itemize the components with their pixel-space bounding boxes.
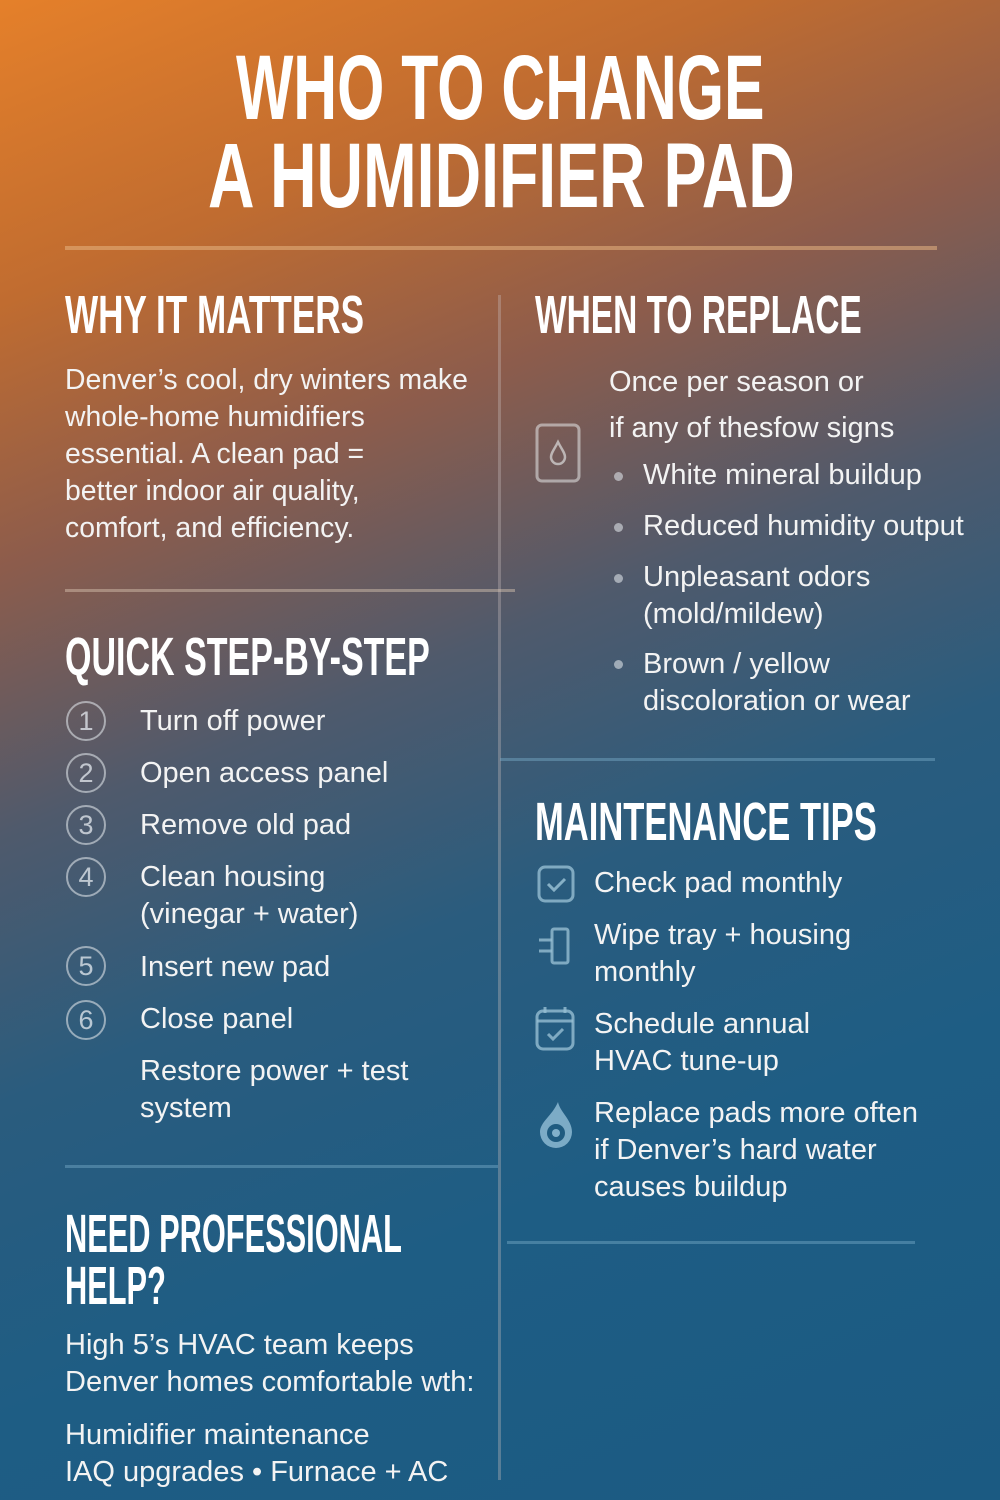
list: steps: Remove old pad [140, 809, 351, 841]
tip: wipe tray [594, 919, 851, 988]
heading: when to replace: WHEN TO REPLACE [535, 285, 862, 345]
list: signs: Reduced humidity output [643, 510, 964, 542]
panel: when to replace [535, 285, 964, 717]
list: steps: Open access panel [140, 757, 388, 789]
text: services [65, 1419, 448, 1488]
list: steps: 4 [78, 862, 94, 892]
list: signs [614, 459, 964, 717]
text: intro [609, 366, 894, 444]
list: steps: Clean housing [140, 861, 325, 893]
text: why it matters body: comfort, and efficiency. [65, 512, 354, 544]
list: steps: 5 [78, 951, 94, 981]
tip: hard water: causes buildup [594, 1171, 787, 1203]
list: signs: (mold/mildew) [643, 598, 823, 630]
text: help body: Denver homes comfortable wth: [65, 1366, 474, 1398]
panel: maintenance tips [535, 792, 918, 1203]
text: why it matters body: whole-home humidifiers [65, 401, 365, 433]
text: help body [65, 1329, 474, 1398]
tip: annual tune-up: Schedule annual [594, 1008, 810, 1040]
panel: need professional help [65, 1204, 474, 1488]
icon: tray [539, 928, 570, 964]
icon: water drop card [536, 424, 580, 482]
icon: calendar [536, 1007, 574, 1050]
tip: wipe tray: Wipe tray + housing [594, 919, 851, 951]
list: steps: 3 [78, 810, 94, 840]
text: services: Humidifier maintenance [65, 1419, 370, 1451]
heading: need professional help [65, 1204, 402, 1316]
list: steps: 2 [78, 758, 94, 788]
list: steps: Close panel [140, 1003, 293, 1035]
text: why it matters body: Denver’s cool, dry winters make [65, 364, 468, 396]
list: steps: system [140, 1092, 232, 1124]
list: steps: 1 [78, 706, 94, 736]
title [208, 37, 795, 227]
icon: flame drop [540, 1102, 572, 1148]
list: steps: Turn off power [140, 705, 325, 737]
list: steps: 6 [78, 1005, 94, 1035]
text: intro: if any of thesfow signs [609, 412, 894, 444]
panel: quick step-by-step [65, 627, 430, 1124]
text: why it matters body: essential. A clean pad = [65, 438, 364, 470]
tip: wipe tray: monthly [594, 956, 696, 988]
tip: check monthly: Check pad monthly [594, 867, 842, 899]
heading: need professional help: HELP? [65, 1256, 166, 1316]
text: intro: Once per season or [609, 366, 864, 398]
heading: quick step-by-step: QUICK STEP-BY-STEP [65, 627, 430, 687]
heading: need professional help: NEED PROFESSIONAL [65, 1204, 402, 1264]
list: signs: White mineral buildup [643, 459, 922, 491]
tip: hard water [594, 1097, 918, 1203]
text: why it matters body: better indoor air quality, [65, 475, 360, 507]
list: signs: Brown / yellow [643, 648, 830, 680]
list: steps: Insert new pad [140, 951, 330, 983]
list: steps: (vinegar + water) [140, 898, 358, 930]
icon: checkbox [538, 866, 574, 902]
tip: hard water: Replace pads more often [594, 1097, 918, 1129]
text: help body: High 5’s HVAC team keeps [65, 1329, 414, 1361]
list: steps: Restore power + test [140, 1055, 408, 1087]
list: signs: discoloration or wear [643, 685, 911, 717]
list: signs: Unpleasant odors [643, 561, 870, 593]
text: why it matters body [65, 364, 468, 544]
panel: why it matters [65, 285, 468, 544]
list: steps [66, 701, 408, 1124]
heading: why it matters: WHY IT MATTERS [65, 285, 364, 345]
title: WHO TO CHANGE [236, 37, 764, 139]
tip: annual tune-up: HVAC tune-up [594, 1045, 779, 1077]
text: services: IAQ upgrades • Furnace + AC [65, 1456, 448, 1488]
title: A HUMIDIFIER PAD [208, 125, 795, 227]
tip: hard water: if Denver’s hard water [594, 1134, 877, 1166]
heading: maintenance tips: MAINTENANCE TIPS [535, 792, 877, 852]
tip: annual tune-up [594, 1008, 810, 1077]
